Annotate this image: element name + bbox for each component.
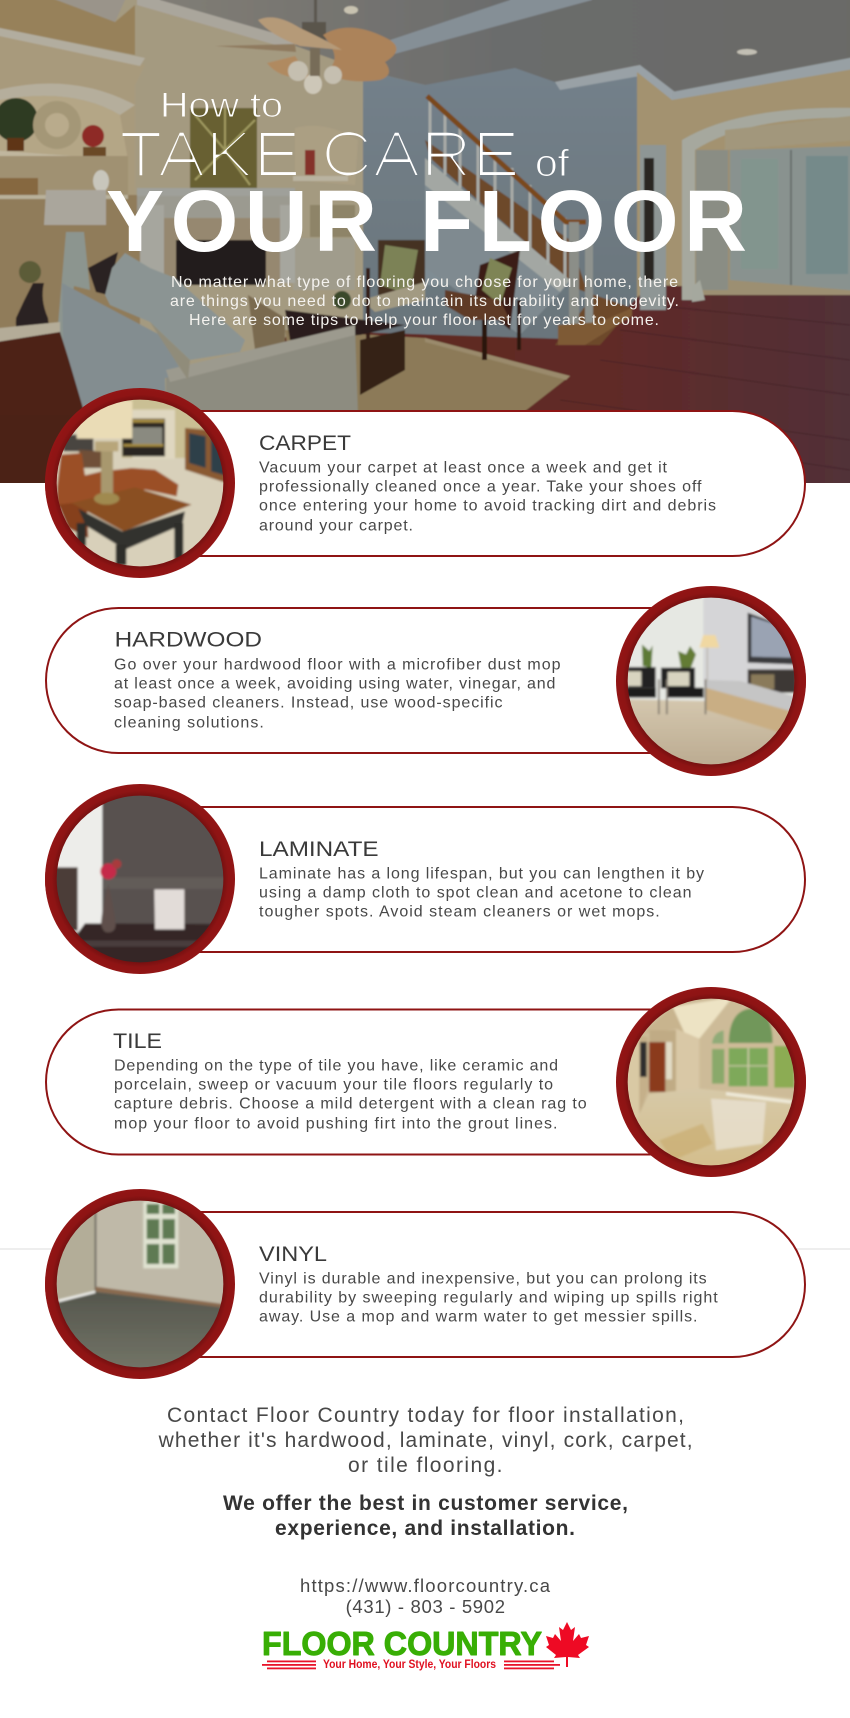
vinyl body: durability by sweeping regularly and wiping up spills right	[259, 1289, 718, 1306]
contact details: (431) - 803 - 5902	[346, 1596, 505, 1617]
title line: YOUR FLOOR	[106, 173, 747, 270]
logo wordmark: FLOOR COUNTRY	[262, 1625, 542, 1662]
vinyl pill	[46, 1212, 805, 1357]
title line: How to: How to	[160, 86, 283, 125]
title word: of: of	[535, 143, 569, 185]
logo left stripes	[262, 1660, 316, 1669]
title line: YOUR FLOOR: YOUR	[106, 173, 377, 270]
vinyl photo	[56, 1200, 224, 1368]
icon: maple leaf	[546, 1622, 589, 1667]
carpet pill	[46, 411, 805, 556]
hardwood body	[114, 656, 561, 731]
tile body: Depending on the type of tile you have, like ceramic and	[114, 1058, 558, 1075]
laminate body: tougher spots. Avoid steam cleaners or wet mops.	[259, 903, 660, 920]
vinyl heading: VINYL	[259, 1243, 327, 1266]
bold statement: We offer the best in customer service,	[223, 1492, 628, 1515]
contact details: https://www.floorcountry.ca	[300, 1575, 551, 1596]
bold statement	[223, 1492, 628, 1540]
hardwood pill	[46, 608, 805, 753]
intro paragraph	[170, 274, 679, 329]
card: vinyl	[45, 1189, 805, 1379]
carpet body: around your carpet.	[259, 518, 413, 535]
laminate body: Laminate has a long lifespan, but you can lengthen it by	[259, 865, 704, 882]
vinyl body: Vinyl is durable and inexpensive, but you can prolong its	[259, 1270, 707, 1287]
vinyl photo ring	[45, 1189, 235, 1379]
vinyl body	[259, 1270, 718, 1325]
tile heading: TILE	[113, 1030, 162, 1053]
tile body: porcelain, sweep or vacuum your tile floors regularly to	[114, 1077, 553, 1094]
logo: Floor Country	[262, 1622, 589, 1671]
laminate pill	[46, 807, 805, 952]
card: laminate	[45, 784, 805, 974]
intro paragraph: Here are some tips to help your floor last for years to come.	[189, 312, 659, 329]
hardwood body: at least once a week, avoiding using water, vinegar, and	[114, 675, 555, 692]
title	[106, 86, 747, 270]
laminate photo	[56, 796, 224, 962]
hardwood body: Go over your hardwood floor with a microfiber dust mop	[114, 656, 561, 673]
background divider	[0, 1248, 850, 1250]
laminate photo ring	[45, 784, 235, 974]
carpet body: once entering your home to avoid tracking dirt and debris	[259, 498, 716, 515]
contact paragraph: or tile flooring.	[348, 1454, 502, 1477]
carpet photo	[56, 400, 224, 566]
contact details	[300, 1575, 551, 1617]
card: tile	[46, 987, 806, 1177]
hardwood heading: HARDWOOD	[115, 629, 262, 652]
carpet body: professionally cleaned once a year. Take your shoes off	[259, 479, 702, 496]
hardwood photo ring	[616, 586, 806, 776]
card: carpet	[45, 388, 805, 578]
contact paragraph: whether it's hardwood, laminate, vinyl, cork, carpet,	[158, 1429, 693, 1452]
hero photo: living room	[0, 0, 850, 510]
intro paragraph: No matter what type of flooring you choose for your home, there	[171, 274, 678, 291]
carpet body: Vacuum your carpet at least once a week and get it	[259, 460, 668, 477]
title line: TAKE CARE: TAKE CARE	[119, 118, 520, 190]
laminate body	[259, 865, 704, 920]
laminate heading: LAMINATE	[259, 838, 379, 861]
tile pill	[46, 1010, 805, 1154]
vinyl body: away. Use a mop and warm water to get messier spills.	[259, 1308, 698, 1325]
contact paragraph: Contact Floor Country today for floor installation,	[167, 1404, 684, 1427]
bold statement: experience, and installation.	[275, 1517, 575, 1540]
contact paragraph	[158, 1404, 693, 1477]
logo right stripes	[504, 1660, 560, 1669]
intro paragraph: are things you need to do to maintain its durability and longevity.	[170, 293, 679, 310]
hardwood body: soap-based cleaners. Instead, use wood-specific	[114, 694, 502, 711]
tile photo ring	[616, 987, 806, 1177]
hardwood photo	[628, 598, 794, 764]
logo tagline: Your Home, Your Style, Your Floors	[323, 1659, 496, 1671]
title line: YOUR FLOOR: FLOOR	[420, 173, 747, 270]
hardwood body: cleaning solutions.	[114, 714, 264, 731]
tile photo	[628, 998, 794, 1166]
tile body	[114, 1058, 587, 1133]
card: hardwood	[46, 586, 806, 776]
carpet body	[259, 460, 716, 535]
tile body: capture debris. Choose a mild detergent with a clean rag to	[114, 1096, 587, 1113]
laminate body: using a damp cloth to spot clean and acetone to clean	[259, 884, 692, 901]
carpet heading: CARPET	[259, 432, 351, 455]
tile body: mop your floor to avoid pushing firt into the grout lines.	[114, 1116, 558, 1133]
carpet photo ring	[45, 388, 235, 578]
